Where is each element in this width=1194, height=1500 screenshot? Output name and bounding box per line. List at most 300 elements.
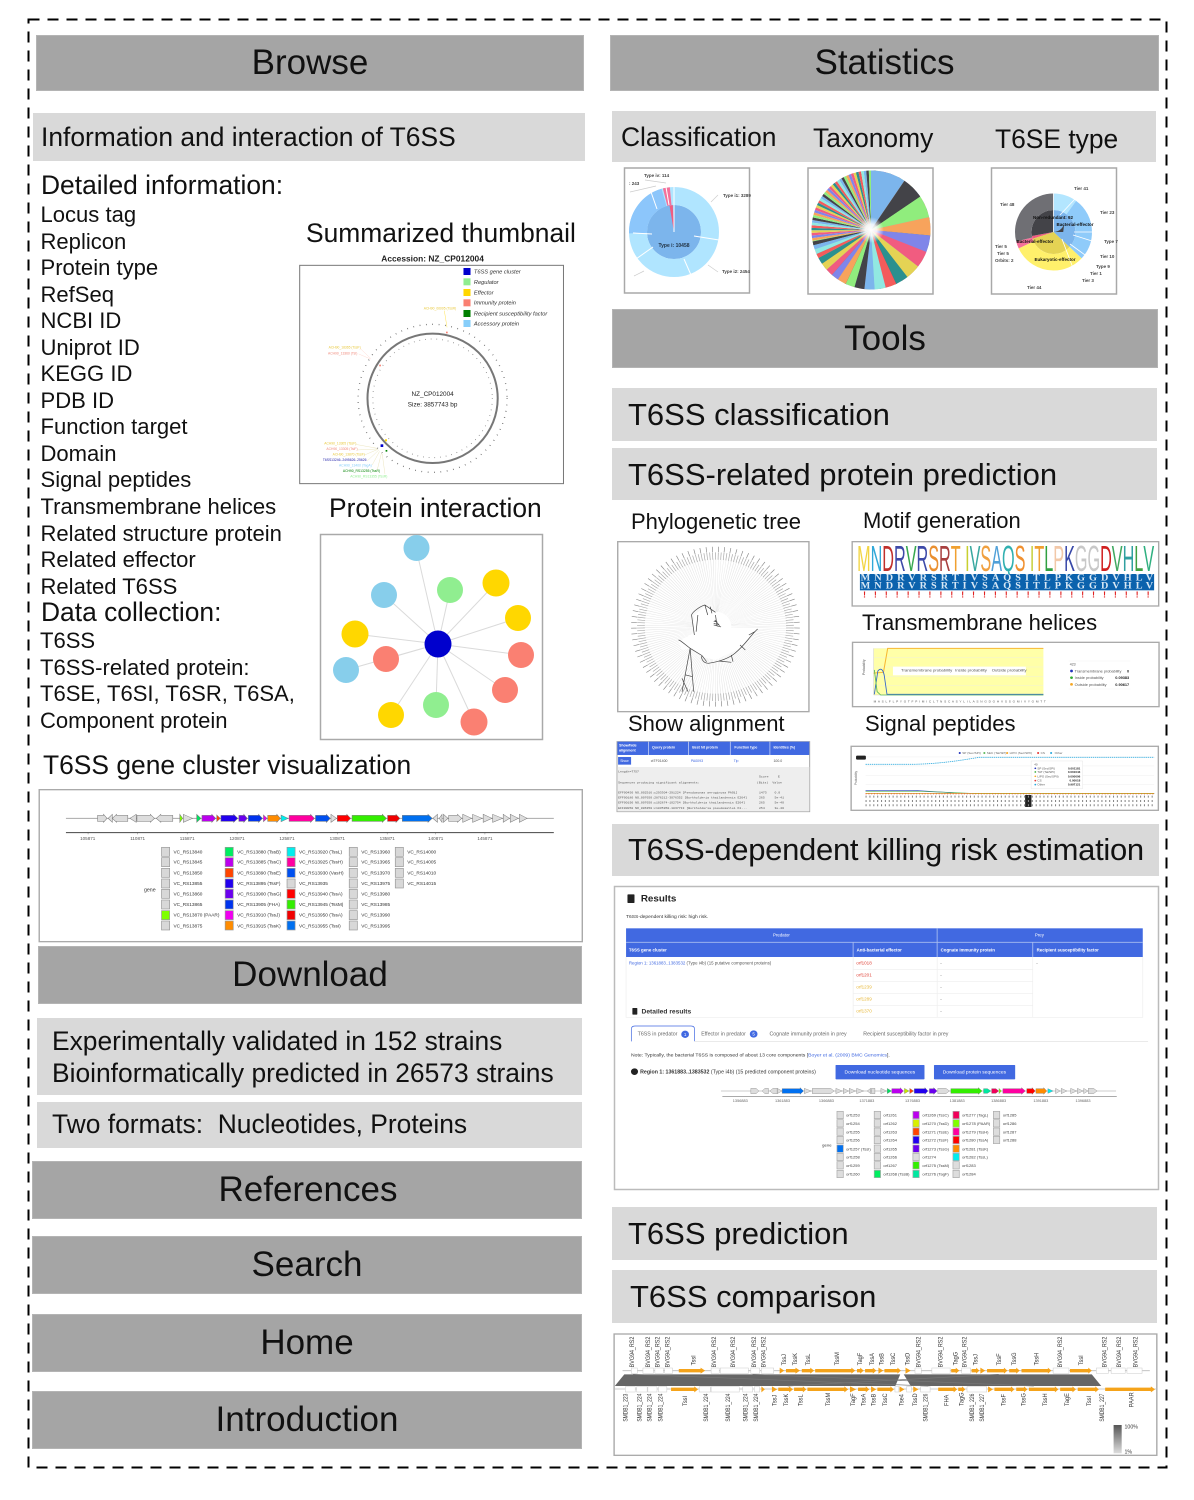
results table: - [940,997,942,1002]
chart: T6SS gene cluster track and legend: 110871 [130,836,146,841]
chart: T6SS cluster comparison: BVG94_RS2 [917,1337,923,1367]
chart: T6SS gene cluster track and legend: VC_RS13875 [173,924,203,929]
detailed results with gene cluster: orf1284 [962,1172,977,1177]
chart: T6SS gene cluster track and legend: VC_RS13850 [173,870,203,875]
subheading row: Statistics categories: Classification [621,122,776,152]
detailed results with gene cluster: orf1280 (TssA) [962,1138,989,1143]
chart: T6SS cluster comparison: TssM [835,1352,841,1365]
subheading row: Statistics categories: T6SE type [995,124,1118,154]
chart: T6SS gene cluster track and legend: VC_RS13880 (TssB) [237,849,281,854]
chart: signal peptides probability plot: CS [1041,751,1045,755]
text block: detailed information list: Related T6SS [40,574,177,599]
heading: T6SS-dependent killing risk estimation: T6SS-dependent killing risk estimation [628,832,1144,867]
table: show alignment screenshot: Length=7757 [618,769,639,773]
chart: signal peptides probability plot: CS [1037,779,1042,783]
heading: Search [32,1236,582,1294]
chart: T6SS cluster comparison: TssJ [973,1354,980,1365]
results table: - [1036,961,1038,966]
table: show alignment screenshot: EFF00450 NO_002516:c293304-291224 [Pseudomonas aeruginosa PAO1] [618,791,738,795]
chart: circular genome thumbnail: Accessory protein [473,322,519,328]
heading: T6SS comparison [612,1270,1157,1323]
table: show alignment screenshot: alignment [619,749,637,753]
text block: detailed information list: Protein type [40,255,158,280]
table: show alignment screenshot: Function type [734,746,757,750]
chart: T6SS cluster comparison: TssF [1002,1394,1008,1406]
chart: T6SS cluster comparison: TagF [858,1352,864,1365]
chart: T6SS gene cluster track and legend: VC_RS13885 (TssC) [237,860,281,865]
chart: T6SS cluster comparison: TssC [891,1353,897,1365]
chart: T6SS cluster comparison: TagE [1065,1393,1071,1406]
text block: detailed information list: Related structure protein [40,521,282,546]
heading: References: References [218,1170,397,1209]
results table [626,894,1143,1017]
text block: download formats: Two formats: Nucleotides, Proteins [52,1109,467,1139]
heading: Browse [36,35,584,91]
chart: T6SS cluster comparison: BVG94_RS2 [752,1337,758,1367]
chart: T6SS cluster comparison: TssL [806,1353,812,1365]
heading: T6SS-dependent killing risk estimation [612,824,1159,876]
chart: T6SS gene cluster track and legend: 120871 [230,836,245,841]
text block: detailed information list: NCBI ID [40,308,121,333]
chart: T6SS gene cluster track and legend: VC_RS13865 [173,902,203,907]
chart: signal peptides probability plot: SP (Sec/SPI) [1037,766,1055,770]
chart: T6SS cluster comparison: TssB [872,1394,878,1406]
detailed results with gene cluster: orf1287 [1003,1129,1017,1134]
chart: T6SS cluster comparison: TssJ [782,1354,788,1365]
table: show alignment screenshot: Query protein [652,746,675,750]
table: show alignment screenshot: Value [772,780,782,784]
chart: T6SE type sunburst: Tier 5 [997,251,1009,256]
heading: Summarized thumbnail: Summarized thumbnail [306,218,576,248]
chart: classification sunburst: : 243 [629,181,640,186]
chart: circular genome thumbnail: ACH90_RS13255 (TssR) [343,469,380,473]
chart: signal peptides probability plot: Other [1037,783,1045,787]
detailed results with gene cluster: 1391883 [1033,1099,1048,1103]
chart: transmembrane helices probability plot: Outside probability [1075,683,1107,687]
detailed results with gene cluster: orf1269 (TssC) [922,1113,949,1118]
table: show alignment screenshot: 1473 [759,791,767,795]
detailed results with gene cluster: orf1266 [883,1155,898,1160]
detailed results with gene cluster: 1386883 [991,1099,1006,1103]
chart: T6SS gene cluster track and legend: VC_RS14000 [407,849,437,854]
text block: detailed information list: Function target [40,414,188,439]
heading: T6SS gene cluster visualization: T6SS gene cluster visualization [43,750,411,780]
detailed results with gene cluster: Cognate immunity protein in prey [769,1032,847,1038]
text block: validated and predicted strains [37,1018,582,1095]
detailed results with gene cluster: orf1256 [846,1138,861,1143]
chart: signal peptides probability plot: SP (Sec/SPI) [962,751,981,755]
chart: T6SS cluster comparison: FHA [945,1395,951,1406]
detailed results with gene cluster: orf1279 (TssH) [962,1129,989,1134]
detailed results with gene cluster [631,1026,1148,1178]
chart: circular genome thumbnail: ACH90_RS13355 (TssR) [350,474,387,478]
detailed results with gene cluster: orf1278 (PAAR) [962,1121,991,1126]
chart: sequence motif logo: MNDRVRSRT IVSAQS ITLPKGGDVHLV [857,537,1154,579]
chart: sequence motif logo: !!!!!!!!!!!!!!!!!!!!!!!!!!! [863,591,1150,600]
chart: T6SS gene cluster track and legend: VC_RS13840 [173,849,203,854]
chart: T6SE type sunburst: Tier 41 [1074,186,1089,191]
chart: T6SS cluster comparison: 100% [1124,1425,1138,1431]
chart: T6SS gene cluster track and legend: VC_RS13965 [361,860,391,865]
chart: circular genome thumbnail: Size: 3857743 bp [408,402,458,409]
chart: sequence motif logo: MNDRVRSRTIVSAQSITLPKGGDVHLV [861,581,1154,592]
chart: T6SS cluster comparison: BVG94_RS2 [938,1337,944,1367]
results table: Prey [1035,933,1045,938]
chart: T6SS cluster comparison: BVG94_RS2 [1102,1337,1109,1367]
heading: Introduction: Introduction [216,1400,398,1439]
text block: validated and predicted strains: Experimentally validated in 152 strains [52,1026,502,1056]
chart: T6SS cluster comparison: TssG [1012,1352,1018,1365]
chart: T6SE type sunburst: Tier 5 [995,244,1007,249]
chart: T6SS gene cluster track and legend: VC_RS13990 [361,913,391,918]
detailed results with gene cluster: orf1285 [1003,1113,1017,1118]
heading: Search: Search [252,1245,362,1284]
chart: transmembrane helices probability plot: Transmembrane probability [1075,670,1122,674]
detailed results with gene cluster: 1366883 [819,1099,834,1103]
chart: signal peptides probability plot: LIPO (Sec/SPII) [1037,774,1059,778]
heading: Statistics [610,35,1159,91]
chart: T6SS gene cluster track and legend: 125871 [279,836,295,841]
chart: classification sunburst: Type i2: 2454 [722,269,750,274]
label: Transmembrane helices: Transmembrane helices [862,610,1097,635]
chart: T6SS cluster comparison: SMDB1_227 [980,1394,986,1422]
table: show alignment screenshot: Best hit protein [692,746,718,750]
results table: T6SS-dependent killing risk: high risk. [626,914,708,920]
table: show alignment screenshot: Show/hide [619,744,637,748]
chart: T6SS cluster comparison: TssA [861,1394,867,1406]
table: show alignment screenshot: 0.0 [775,791,780,795]
chart: signal peptides probability plot: 40 [1034,763,1038,767]
detailed results with gene cluster: 1381883 [950,1099,965,1103]
text block: detailed information list: Signal peptides [40,467,191,492]
chart: T6SE type sunburst: Type 7 [1104,239,1118,244]
chart: T6SE type sunburst: Tier 3 [1082,278,1094,283]
chart: T6SS cluster comparison: BVG94_RS2 [962,1337,968,1367]
detailed results with gene cluster: orf1275 (TssM) [922,1163,950,1168]
chart: circular genome thumbnail: ACH90_13870 (TssF) [333,452,365,456]
chart: T6SS cluster comparison: TssL [798,1394,805,1406]
heading: T6SS comparison: T6SS comparison [630,1279,876,1314]
chart: T6SS gene cluster track and legend: 140871 [428,836,444,841]
chart: T6SS gene cluster track and legend: VC_RS13910 (TssJ) [237,913,280,918]
detailed results with gene cluster: orf1260 [846,1172,861,1177]
chart: signal peptides probability plot: Other [1055,751,1063,755]
heading: T6SS-related protein prediction: T6SS-related protein prediction [628,457,1057,492]
text block: detailed information list: PDB ID [40,388,114,413]
chart: transmembrane helices probability plot: M A S L F L P Y G T F P I M I C L T N S C A S Y L I L A S N G D G H V S S G M I V Y G M T T [874,699,1046,703]
chart: signal peptides probability plot: Probability [854,771,858,785]
table: show alignment screenshot: (Bits) [757,780,768,784]
results table: T6SS gene cluster [629,947,667,952]
detailed results with gene cluster: orf1282 (TssL) [962,1155,989,1160]
table: show alignment screenshot: ctTF01400 [651,759,668,763]
heading: Browse: Browse [252,43,368,82]
chart: circular genome thumbnail: Accession: NZ_CP012004 [381,253,484,263]
label: Show alignment: Show alignment [628,711,785,736]
text block: detailed information list: Uniprot ID [40,335,140,360]
chart: T6SS gene cluster track and legend: VC_RS13945 (TssM) [299,902,344,907]
detailed results with gene cluster: orf1264 [883,1138,898,1143]
chart: T6SS gene cluster track and legend: VC_RS13905 (FHA) [237,902,280,907]
chart: T6SS cluster comparison: TssC [883,1393,889,1406]
table: show alignment screenshot: Score [759,775,769,779]
subheading: Information and interaction of T6SS [33,113,585,161]
heading: T6SS prediction [612,1207,1157,1260]
detailed results with gene cluster: orf1271 (TssE) [922,1129,949,1134]
text block: detailed information list: Replicon [40,229,126,254]
chart: T6SS cluster comparison: TagG [959,1392,966,1406]
chart: transmembrane helices probability plot: Outside probability [992,668,1028,673]
chart: T6SS gene cluster track and legend: VC_RS13890 (TssE) [237,870,281,875]
detailed results with gene cluster: Download protein sequences [943,1070,1007,1076]
chart: signal peptides probability plot: 0.997121 [1068,783,1081,787]
text block: data collection list [40,628,295,733]
chart: T6SS gene cluster track and legend: VC_RS13920 (TssL) [299,849,343,854]
chart: transmembrane helices probability plot: 0.90617 [1115,683,1129,687]
chart: circular genome thumbnail: ACH90_13305 (TsiF) [326,447,358,451]
chart: circular genome thumbnail: Recipient susceptibility factor [474,311,548,317]
chart: T6SS gene cluster track and legend: VC_RS13940 (TssA) [299,891,343,896]
detailed results with gene cluster: 5 [752,1032,755,1037]
chart: T6SS cluster comparison: BVG94_RS2 [665,1337,671,1367]
chart: circular genome thumbnail: Immunity protein [474,301,516,307]
chart: T6SS cluster comparison: PAAR [1130,1392,1136,1407]
chart: T6SE type sunburst: Tier 1 [1090,271,1102,276]
chart: T6SS cluster comparison: TagF [851,1393,857,1406]
heading: T6SS classification [612,388,1157,441]
chart: T6SS cluster comparison: SMDB1_224 [704,1393,710,1422]
chart: signal peptides probability plot: LIPO (Sec/SPII) [1010,751,1032,755]
results table: orf1201 [856,973,872,978]
subheading row: Statistics categories: Taxonomy [813,123,933,153]
table: show alignment screenshot: Identities (%) [773,746,795,750]
results table: Predator [773,933,790,938]
chart: T6SS cluster comparison: TssK [793,1353,799,1365]
chart: T6SS gene cluster track and legend: VC_RS13970 [361,870,391,875]
heading: Home: Home [260,1323,354,1362]
results table: orf1289 [856,997,872,1002]
chart: T6SS cluster comparison: Tse4 [899,1393,905,1406]
detailed results with gene cluster: orf1265 [883,1146,898,1151]
text block: data collection list: Component protein [40,708,228,733]
heading: Statistics: Statistics [814,43,955,82]
chart: T6SS cluster comparison: SMDB1_224 [744,1393,750,1422]
chart: T6SS gene cluster track and legend: VC_RS14005 [407,860,437,865]
detailed results with gene cluster: 1371883 [859,1099,874,1103]
chart: T6SS gene cluster track and legend: 145871 [477,836,493,841]
detailed results with gene cluster: orf1259 [846,1163,860,1168]
chart: T6SS gene cluster track and legend: 135871 [380,836,395,841]
detailed results with gene cluster: 1 [684,1032,687,1037]
heading: References [32,1161,582,1219]
chart: transmembrane helices probability plot: Transmembrane probability [901,668,953,673]
table: show alignment screenshot: EFF00180 NO_007650:2876212-3076352 [Burkholderia thailandensis E264] [618,796,747,800]
chart: T6SS gene cluster track and legend: VC_RS13960 [361,849,391,854]
results table: - [940,973,942,978]
chart: T6SS cluster comparison: BVG94_RS2 [712,1337,718,1367]
chart: circular genome thumbnail: ACH90_13400 (TagA) [339,463,372,467]
detailed results with gene cluster: orf1276 (TagF) [922,1172,949,1177]
chart: T6SS gene cluster track and legend: VC_RS13900 (TssG) [237,891,282,896]
chart: T6SE type sunburst: Eukaryotic-effector [1034,257,1076,262]
chart: T6SS cluster comparison: TssM [826,1393,832,1406]
results table: - [940,985,942,990]
chart: T6SS gene cluster track and legend: VC_RS14015 [407,881,437,886]
chart: T6SS cluster comparison: SMDB1_224 [754,1393,760,1422]
chart: T6SS gene cluster track and legend: VC_RS13955 (TssI) [299,924,341,929]
chart: T6SS gene cluster track and legend: VC_RS13950 (TssA) [299,913,343,918]
chart: T6SS cluster comparison: TssH [1043,1393,1049,1406]
detailed results with gene cluster: orf1277 (TagL) [962,1113,989,1118]
chart: T6SS gene cluster track and legend: 105871 [80,836,96,841]
chart: T6SE type sunburst: Tier 10 [1100,254,1115,259]
chart: T6SS cluster comparison: SMDB1_224 [648,1393,654,1422]
chart: T6SS cluster comparison: SMDB1_226 [923,1394,929,1422]
table: show alignment screenshot: 100.0 [773,759,782,763]
text block: data collection list: T6SE, T6SI, T6SR, T6SA, [40,681,295,706]
chart: transmembrane helices probability plot: Inside probability [955,668,988,673]
text block: detailed information list [40,202,282,599]
chart: T6SS cluster comparison: BVG94_RS2 [655,1337,662,1367]
chart: T6SS gene cluster track and legend: 115871 [180,836,195,841]
chart: T6SS cluster comparison: BVG94_RS2 [1133,1337,1140,1367]
chart: T6SS cluster comparison: TssD [906,1353,912,1365]
label: Phylogenetic tree: Phylogenetic tree [631,509,801,534]
chart: T6SS cluster comparison: SMDB1_223 [623,1394,630,1422]
chart: T6SE type sunburst: Tier 48 [1000,202,1015,207]
heading: Introduction [32,1391,582,1449]
chart: T6SS gene cluster track and legend: VC_RS13980 [361,891,391,896]
chart: T6SS cluster comparison: BVG94_RS2 [646,1337,652,1367]
detailed results with gene cluster: Recipient susceptibility factor in prey [863,1032,949,1038]
subheading: Information and interaction of T6SS: Information and interaction of T6SS [41,122,456,152]
results table: - [940,961,942,966]
heading: T6SS classification: T6SS classification [628,397,890,432]
detailed results with gene cluster: Download nucleotide sequences [845,1070,916,1076]
subheading row: Statistics categories [612,111,1156,162]
table: show alignment screenshot: 5e-41 [775,796,784,800]
detailed results with gene cluster: 1396883 [1076,1099,1091,1103]
chart: signal peptides probability plot: 0.000006 [1068,774,1081,778]
heading: Tools [612,309,1158,368]
chart: T6SE type sunburst: Orbits: 2 [995,258,1014,263]
chart: T6SS cluster comparison: TssF [997,1353,1003,1365]
table: show alignment screenshot: 5e-40 [775,801,784,805]
detailed results with gene cluster: orf1253 [846,1113,861,1118]
detailed results with gene cluster: orf1273 (TssG) [922,1146,950,1151]
table: show alignment screenshot: PA0093 [691,759,703,763]
chart: signal peptides probability plot: SEC (Tat/SPI) [987,751,1006,755]
text block: detailed information list: Transmembrane helices [40,494,276,519]
text block: data collection list: T6SS [40,628,95,653]
chart: T6SS cluster comparison: SMDB1_226 [970,1394,976,1422]
heading: Data collection: Data collection: [41,597,221,627]
text block: detailed information list: Domain [40,441,116,466]
label: Signal peptides: Signal peptides [865,711,1015,736]
chart: T6SS cluster comparison: TagG [953,1351,960,1365]
table: show alignment screenshot: EFF00190 NO_007650:c102874-102754 [Burkholderia thailandensis E264] [618,801,745,805]
chart: circular genome thumbnail: ACH90_13305 (TssF) [324,441,356,445]
detailed results with gene cluster: orf1258 [846,1155,861,1160]
chart: T6SS gene cluster track and legend: VC_RS13860 [173,891,203,896]
chart: T6SS cluster comparison: TssH [1034,1353,1040,1365]
detailed results with gene cluster: Note: Typically, the bacterial T6SS is composed of about 13 core components [Boyer et al. (2009) BMC Genomics]. [631,1053,890,1059]
detailed results with gene cluster: orf1254 [846,1121,861,1126]
heading: Protein interaction: Protein interaction [329,493,542,523]
detailed results with gene cluster: Effector in predator [701,1032,746,1038]
chart: T6SE type sunburst: Tier 44 [1027,285,1042,290]
chart: transmembrane helices probability plot: 423 [1070,663,1076,667]
chart: T6SS cluster comparison: TssJ [772,1395,779,1406]
chart: circular genome thumbnail: T6SS gene cluster [474,270,522,276]
text block: download formats [37,1102,582,1148]
chart: T6SS cluster comparison: TssK [784,1394,790,1406]
table: show alignment screenshot: 254 [759,806,765,810]
chart: T6SS cluster comparison: BVG94_RS2 [1058,1337,1064,1367]
chart: T6SS gene cluster track and legend: VC_RS13845 [173,860,203,865]
heading: Tools: Tools [844,319,926,358]
chart: T6SS cluster comparison: TssG [1022,1393,1028,1406]
chart: T6SS gene cluster track and legend: VC_RS13975 [361,881,391,886]
detailed results with gene cluster: orf1268 (TssB) [883,1172,910,1177]
detailed results with gene cluster: orf1274 [922,1155,937,1160]
detailed results with gene cluster: orf1283 [962,1163,977,1168]
table: show alignment screenshot: 3e-40 [775,806,784,810]
chart: T6SS gene cluster track and legend: VC_RS14010 [407,870,437,875]
chart: T6SS cluster comparison: TssI [683,1396,689,1406]
chart: T6SS gene cluster track and legend: gene [144,887,156,893]
detailed results with gene cluster: orf1262 [883,1121,897,1126]
chart: T6SS gene cluster track and legend: VC_RS13985 [361,902,391,907]
results table: orf1239 [856,985,872,990]
chart: T6SS cluster comparison: TssI [1079,1355,1085,1365]
chart: circular genome thumbnail: NZ_CP012004 [412,391,454,398]
detailed results with gene cluster: orf1257 (TssI) [846,1146,871,1151]
chart: T6SS cluster comparison: SMDB1_224 [726,1393,732,1422]
heading: Home [32,1314,582,1372]
chart: T6SS gene cluster track and legend: VC_RS13870 (PAAR) [173,913,220,918]
chart: T6SS cluster comparison: TssD [913,1393,919,1406]
detailed results with gene cluster: 1361883 [775,1099,790,1103]
table: show alignment screenshot: Sequences producing significant alignments: [618,780,700,784]
chart: T6SS cluster comparison: BVG94_RS2 [1117,1337,1123,1367]
text block: detailed information list: RefSeq [40,282,114,307]
text block: validated and predicted strains: Bioinformatically predicted in 26573 strains [52,1058,554,1088]
chart: T6SS cluster comparison: BVG94_RS2 [630,1337,636,1367]
detailed results with gene cluster: gene [822,1143,832,1148]
detailed results with gene cluster: orf1255 [846,1129,861,1134]
chart: T6SS gene cluster track and legend: 130871 [330,836,345,841]
table: show alignment screenshot: EFF00050 NO_006350:c1835950-1837713 [Burkholderia pseudomallei K1... [618,806,747,810]
results table: - [940,1009,942,1014]
results table: Results [641,894,676,905]
detailed results with gene cluster: 1376883 [905,1099,920,1103]
detailed results with gene cluster: 1356883 [733,1099,748,1103]
chart: T6SE type sunburst: Type 9 [1096,264,1110,269]
chart: T6SE type sunburst: Tier 23 [1100,210,1115,215]
detailed results with gene cluster: orf1261 [883,1113,897,1118]
detailed results with gene cluster: orf1272 (TssF) [922,1138,949,1143]
detailed results with gene cluster: orf1263 [883,1129,898,1134]
chart: signal peptides probability plot: 0.001181 [1068,766,1081,770]
detailed results with gene cluster: T6SS in predator [638,1032,678,1038]
chart: T6SS gene cluster track and legend: VC_RS13855 [173,881,203,886]
text block: detailed information list: KEGG ID [40,361,132,386]
chart: T6SS cluster comparison: SMDB1_227 [1100,1394,1106,1422]
chart: classification sunburst: Type i: 10458 [658,243,690,249]
detailed results with gene cluster: orf1286 [1003,1121,1017,1126]
chart: T6SE type sunburst: Bacterial-effector [1016,239,1054,244]
